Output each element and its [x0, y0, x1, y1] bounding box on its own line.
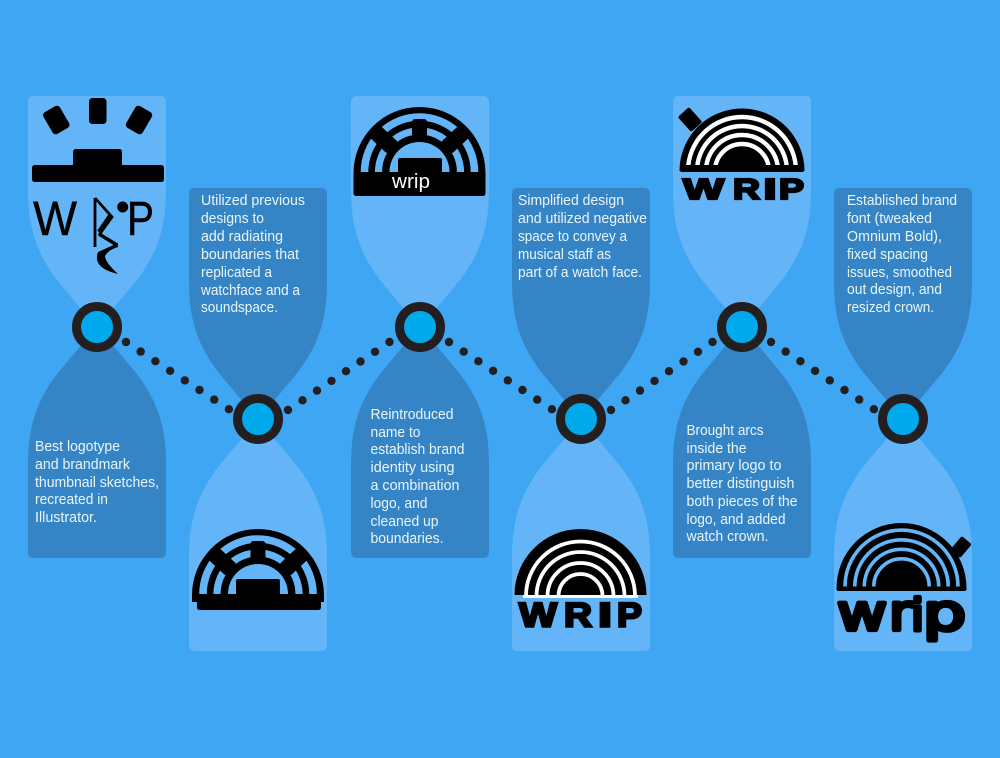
logo 3: dome with wrip wordmark [354, 107, 486, 196]
text: step 2 description: designs to [201, 211, 264, 227]
logo 5: arcs inside dome with crown and WRIP wordmark: W [683, 174, 725, 206]
text: step 5 description: watch crown. [686, 529, 768, 545]
logo 6: final logo with crown and rounded wrip wordmark: i [911, 590, 924, 641]
text: step 5 description [686, 423, 798, 545]
text: step 6 description: Omnium Bold), [847, 229, 942, 245]
panel: step 5 logo [673, 96, 811, 328]
text: step 4 description: part of a watch face. [518, 265, 642, 281]
text: step 2 description: add radiating [201, 229, 283, 245]
timeline node 5 [722, 306, 762, 348]
text: step 6 description: font (tweaked [847, 211, 932, 227]
text: step 1 description: Illustrator. [35, 510, 97, 526]
text: step 6 description [847, 193, 957, 316]
logo 5: arcs inside dome with crown and WRIP wordmark: R [733, 174, 760, 206]
logo 6: final logo with crown and rounded wrip wordmark: w [837, 584, 887, 642]
text: step 1 description: thumbnail sketches, [35, 475, 159, 491]
text: step 3 description [370, 407, 464, 547]
panel: step 6 logo [834, 419, 972, 651]
text: step 6 description: issues, smoothed [847, 265, 952, 281]
panel: step 6 description [834, 188, 972, 420]
text: step 2 description: watchface and a [200, 283, 301, 299]
text: step 3 description: establish brand [370, 442, 464, 458]
logo 4: negative space arcs with WRIP wordmark [514, 529, 646, 634]
text: step 3 description: cleaned up [370, 514, 438, 530]
text: step 5 description: primary logo to [686, 458, 782, 474]
logo 4: negative space arcs with WRIP wordmark: R [564, 596, 592, 634]
panel: step 4 logo [512, 419, 650, 651]
text: step 5 description: logo, and added [686, 512, 786, 528]
timeline node 4 [560, 398, 602, 440]
logo 5: arcs inside dome with crown and WRIP wordmark: P [779, 174, 804, 206]
logo 4: negative space arcs with WRIP wordmark: I [598, 596, 612, 634]
panel: step 2 logo [189, 419, 327, 651]
text: step 2 description: boundaries that [201, 247, 299, 263]
panel: step 1 logo [28, 96, 166, 328]
text: step 1 description: and brandmark [35, 457, 131, 473]
logo 5: arcs inside dome with crown and WRIP wordmark [678, 107, 804, 206]
text: step 3 description: a combination [370, 478, 460, 494]
logo 1: sketch brandmark and logotype [32, 98, 164, 274]
text: step 6 description: Established brand [847, 193, 957, 209]
panel: step 4 description [512, 188, 650, 420]
timeline node 1 [76, 306, 118, 348]
logo 1: sketch brandmark and logotype: P [127, 193, 154, 246]
logo 6: final logo with crown and rounded wrip wordmark [836, 523, 972, 642]
panel: step 5 description [673, 326, 811, 558]
logo 6: final logo with crown and rounded wrip wordmark: r [889, 584, 912, 642]
text: step 2 description: soundspace. [201, 300, 278, 316]
logo 6: final logo with crown and rounded wrip wordmark: p [923, 584, 966, 642]
text: step 5 description: better distinguish [686, 476, 794, 492]
text: step 6 description: out design, and [847, 282, 942, 298]
dotted timeline connector [122, 338, 878, 414]
text: step 5 description: inside the [686, 441, 746, 457]
text: step 2 description [200, 193, 305, 316]
logo 4: negative space arcs with WRIP wordmark: W [519, 596, 558, 634]
logo 1: sketch brandmark and logotype: W [33, 193, 78, 246]
text: step 5 description: Brought arcs [686, 423, 764, 439]
text: step 4 description [518, 193, 647, 281]
timeline node 6 [882, 398, 924, 440]
text: step 1 description: recreated in [35, 492, 108, 508]
text: step 2 description: replicated a [201, 265, 273, 281]
text: step 4 description: and utilized negative [518, 211, 647, 227]
text: step 3 description: logo, and [370, 496, 428, 512]
logo 3: dome with wrip wordmark: wrip [391, 171, 430, 193]
text: step 6 description: fixed spacing [847, 247, 928, 263]
text: step 4 description: musical staff as [518, 247, 611, 263]
text: step 3 description: boundaries. [370, 531, 444, 547]
text: step 4 description: Simplified design [518, 193, 624, 209]
panel: step 3 description [351, 326, 489, 558]
text: step 3 description: name to [370, 425, 420, 441]
text: step 2 description: Utilized previous [201, 193, 305, 209]
logo 4: negative space arcs with WRIP wordmark: P [617, 596, 642, 634]
text: step 1 description [35, 439, 159, 526]
panel: step 1 description [28, 326, 166, 558]
logo 5: arcs inside dome with crown and WRIP wordmark: I [764, 174, 776, 206]
text: step 1 description: Best logotype [35, 439, 120, 455]
logo 2: dome watchface with base [192, 529, 324, 610]
timeline node 3 [400, 306, 440, 348]
timeline node 2 [238, 398, 278, 440]
panel: step 2 description [189, 188, 327, 420]
text: step 5 description: both pieces of the [686, 494, 798, 510]
text: step 3 description: identity using [370, 460, 454, 476]
text: step 4 description: space to convey a [518, 229, 628, 245]
text: step 6 description: resized crown. [847, 300, 934, 316]
panel: step 3 logo [351, 96, 489, 328]
text: step 3 description: Reintroduced [370, 407, 454, 423]
